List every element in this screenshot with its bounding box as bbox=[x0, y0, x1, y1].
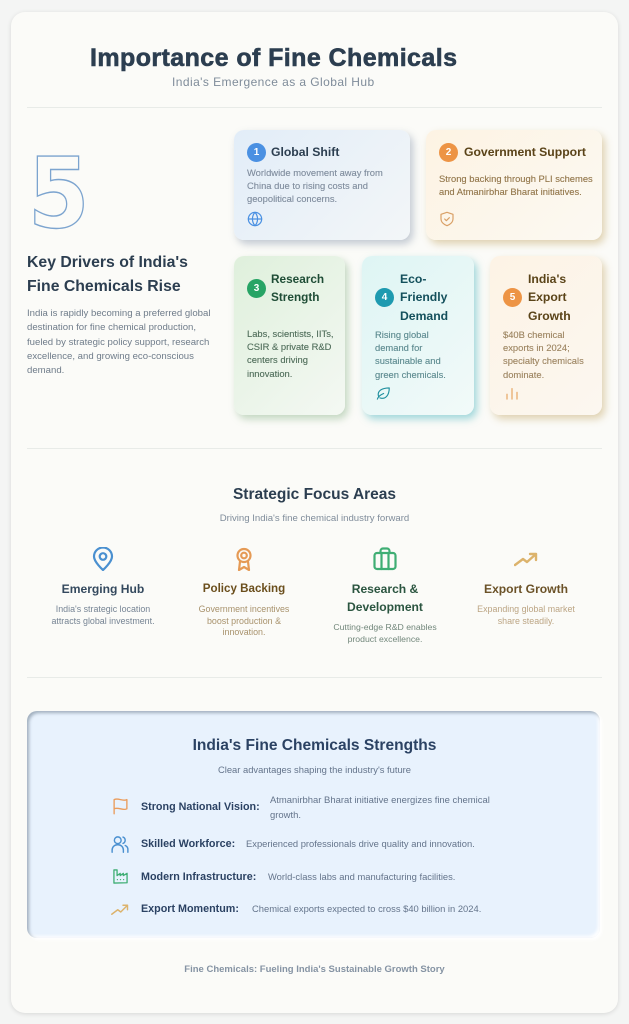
icon: trending up bbox=[514, 552, 538, 566]
description: Worldwide movement away from bbox=[247, 167, 383, 178]
label: Strong National Vision: bbox=[141, 801, 260, 813]
badge 5: 5 bbox=[510, 292, 515, 303]
card 4: eco-friendly demand bbox=[362, 256, 474, 415]
description: CSIR & private R&D bbox=[247, 341, 331, 352]
value: World-class labs and manufacturing facilities. bbox=[268, 871, 455, 882]
description: Rising global bbox=[375, 329, 429, 340]
label: Skilled Workforce: bbox=[141, 838, 235, 850]
badge 2 bbox=[439, 143, 458, 162]
icon: briefcase bbox=[373, 547, 397, 570]
card 5: export growth bbox=[490, 256, 602, 415]
icon: leaf bbox=[376, 387, 390, 400]
heading: Eco- bbox=[400, 272, 426, 286]
heading: Development bbox=[347, 600, 423, 614]
description: Cutting-edge R&D enables bbox=[333, 622, 437, 632]
description: and Atmanirbhar Bharat initiatives. bbox=[439, 186, 582, 197]
description: centers driving bbox=[247, 354, 308, 365]
section subheading: Driving India's fine chemical industry forward bbox=[220, 513, 409, 524]
heading bbox=[347, 582, 423, 614]
value: Chemical exports expected to cross $40 billion in 2024. bbox=[252, 903, 481, 914]
footer: Fine Chemicals: Fueling India's Sustainable Growth Story bbox=[184, 964, 445, 975]
focus: emerging hub bbox=[51, 547, 155, 626]
heading: Export Growth bbox=[484, 582, 568, 596]
badge 5 bbox=[503, 288, 522, 307]
description: China due to rising costs and bbox=[247, 180, 368, 191]
left description bbox=[27, 308, 210, 376]
heading: Policy Backing bbox=[203, 582, 285, 595]
heading: Demand bbox=[400, 309, 448, 323]
icon: bar chart bbox=[506, 388, 518, 400]
description bbox=[439, 173, 593, 197]
icon: trending up bbox=[111, 904, 128, 915]
description: Expanding global market bbox=[477, 604, 575, 614]
value: Atmanirbhar Bharat initiative energizes fine chemical bbox=[270, 795, 490, 806]
description: Government incentives bbox=[199, 604, 289, 614]
heading: Strength bbox=[271, 290, 320, 304]
heading bbox=[528, 272, 571, 323]
value bbox=[270, 795, 490, 820]
badge 2: 2 bbox=[446, 147, 451, 158]
description bbox=[503, 329, 584, 380]
row: modern infrastructure bbox=[113, 869, 455, 884]
panel: strengths bbox=[27, 711, 600, 938]
description: green chemicals. bbox=[375, 369, 446, 380]
description: Labs, scientists, IITs, bbox=[247, 328, 334, 339]
description: product excellence. bbox=[348, 634, 422, 644]
description: exports in 2024; bbox=[503, 342, 570, 353]
heading bbox=[400, 272, 448, 323]
description: sustainable and bbox=[375, 355, 441, 366]
description bbox=[375, 329, 446, 380]
heading: Global Shift bbox=[271, 145, 339, 159]
badge 4: 4 bbox=[382, 292, 387, 303]
left description: India is rapidly becoming a preferred global bbox=[27, 308, 210, 319]
icon: flag bbox=[113, 798, 128, 814]
left description: demand. bbox=[27, 365, 64, 376]
badge 4 bbox=[375, 288, 394, 307]
badge 3: 3 bbox=[254, 283, 259, 294]
strengths subheading: Clear advantages shaping the industry's future bbox=[218, 764, 411, 775]
focus: research and development bbox=[333, 547, 437, 644]
heading: Friendly bbox=[400, 290, 447, 304]
description: attracts global investment. bbox=[51, 616, 155, 626]
description bbox=[247, 328, 334, 379]
badge 1: 1 bbox=[254, 147, 259, 158]
heading: Government Support bbox=[464, 145, 586, 159]
description bbox=[199, 604, 289, 637]
card 3: research strength bbox=[234, 256, 345, 415]
icon: location pin bbox=[92, 547, 114, 571]
description: innovation. bbox=[223, 627, 265, 637]
left heading: Fine Chemicals Rise bbox=[27, 278, 181, 295]
description: share steadily. bbox=[498, 616, 554, 626]
left description: destination for fine chemical production, bbox=[27, 322, 196, 333]
icon: people bbox=[111, 836, 129, 853]
description: Strong backing through PLI schemes bbox=[439, 173, 593, 184]
icon: shield bbox=[440, 212, 454, 226]
description bbox=[247, 167, 383, 204]
description: boost production & bbox=[207, 616, 281, 626]
heading: Growth bbox=[528, 309, 571, 323]
section heading: strategic focus areas: Strategic Focus Areas bbox=[233, 486, 396, 503]
heading bbox=[271, 272, 324, 304]
description: geopolitical concerns. bbox=[247, 193, 337, 204]
badge 3 bbox=[247, 279, 266, 298]
description: dominate. bbox=[503, 369, 544, 380]
subtitle: India's Emergence as a Global Hub bbox=[172, 75, 375, 89]
strengths heading: India's Fine Chemicals Strengths bbox=[193, 737, 436, 754]
left description: excellence, and growing eco-conscious bbox=[27, 351, 194, 362]
heading: India's bbox=[528, 272, 566, 286]
description: India's strategic location bbox=[56, 604, 150, 614]
description bbox=[333, 622, 437, 644]
icon: globe bbox=[248, 212, 262, 226]
title: Importance of Fine Chemicals bbox=[90, 44, 457, 72]
description: demand for bbox=[375, 342, 422, 353]
card 2: government support bbox=[426, 130, 602, 240]
description: specialty chemicals bbox=[503, 355, 584, 366]
description bbox=[477, 604, 575, 626]
label: Modern Infrastructure: bbox=[141, 871, 256, 883]
icon: award ribbon bbox=[236, 548, 252, 571]
row: strong national vision bbox=[113, 795, 490, 820]
heading: Research bbox=[271, 272, 324, 286]
description: innovation. bbox=[247, 368, 292, 379]
card 1: global shift bbox=[234, 130, 410, 240]
description: $40B chemical bbox=[503, 329, 564, 340]
left description: fueled by strategic policy support, research bbox=[27, 337, 209, 348]
badge 1 bbox=[247, 143, 266, 162]
heading: Research & bbox=[352, 582, 418, 596]
label: Export Momentum: bbox=[141, 903, 239, 915]
focus: policy backing bbox=[199, 548, 289, 637]
value: Experienced professionals drive quality and innovation. bbox=[246, 838, 475, 849]
row: export momentum bbox=[111, 903, 481, 915]
value: growth. bbox=[270, 810, 301, 820]
description bbox=[51, 604, 155, 626]
heading: Emerging Hub bbox=[62, 582, 144, 596]
row: skilled workforce bbox=[111, 836, 475, 853]
left heading bbox=[27, 254, 188, 295]
focus: export growth bbox=[477, 552, 575, 626]
heading: Export bbox=[528, 290, 567, 304]
left heading: Key Drivers of India's bbox=[27, 254, 188, 271]
icon: factory bbox=[113, 869, 128, 884]
